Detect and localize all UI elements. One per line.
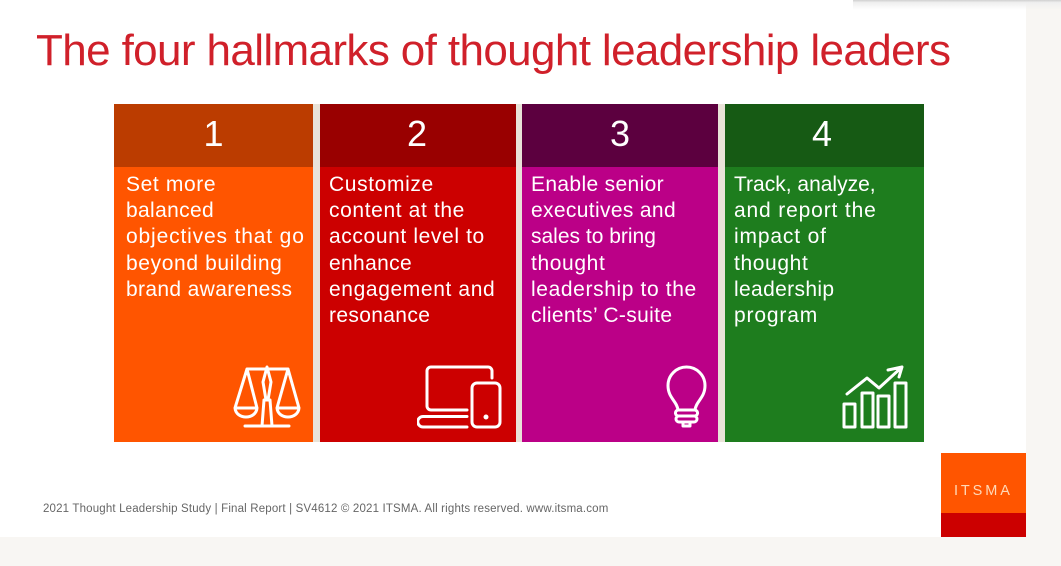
panel: hallmark 2 xyxy=(320,104,516,442)
text 3 xyxy=(531,173,697,327)
text 4: impact of xyxy=(734,225,827,248)
text 1 xyxy=(126,173,305,301)
text 2 xyxy=(329,173,495,327)
logo text: ITSMA xyxy=(954,483,1013,499)
text 3: clients’ C-suite xyxy=(531,304,672,327)
text 3: leadership to the xyxy=(531,278,697,301)
text 3: executives and xyxy=(531,199,676,222)
panel: hallmark 1 xyxy=(114,104,313,442)
icon: light bulb xyxy=(666,366,706,428)
text 2: enhance xyxy=(329,252,412,275)
text 3: Enable senior xyxy=(531,173,664,196)
text 2: content at the xyxy=(329,199,465,222)
text 3: thought xyxy=(531,252,605,275)
text 4 xyxy=(734,173,877,327)
number 2: 2 xyxy=(407,113,427,154)
logo: ITSMA xyxy=(941,453,1026,537)
text 2: account level to xyxy=(329,225,485,248)
text 1: Set more xyxy=(126,173,216,196)
number 1: 1 xyxy=(203,113,224,154)
text 4: leadership xyxy=(734,278,834,301)
number 3 xyxy=(522,104,718,167)
number 4 xyxy=(725,104,924,167)
icon: scales xyxy=(234,366,300,428)
text 2: Customize xyxy=(329,173,434,196)
text 1: brand awareness xyxy=(126,278,292,301)
text 1: balanced xyxy=(126,199,214,222)
number 2 xyxy=(320,104,516,167)
top shadow xyxy=(853,0,1061,10)
icon: laptop and tablet xyxy=(417,366,502,428)
icon: growth chart xyxy=(842,365,908,428)
number 3: 3 xyxy=(610,113,630,154)
panel: hallmark 3 xyxy=(522,104,718,442)
panel: hallmark 4 xyxy=(725,104,924,442)
text 3: sales to bring xyxy=(531,225,656,248)
text 4: Track, analyze, xyxy=(734,173,876,196)
cream divider strip xyxy=(313,104,725,442)
number 1 xyxy=(114,104,313,167)
text 2: engagement and xyxy=(329,278,495,301)
text 4: program xyxy=(734,304,818,327)
number 4: 4 xyxy=(812,113,832,154)
logo red band xyxy=(941,513,1026,537)
text 1: beyond building xyxy=(126,252,282,275)
text 4: and report the xyxy=(734,199,877,222)
text 1: objectives that go xyxy=(126,225,305,248)
text 2: resonance xyxy=(329,304,430,327)
text 4: thought xyxy=(734,252,808,275)
title: The four hallmarks of thought leadership leaders xyxy=(36,26,950,75)
footer text: 2021 Thought Leadership Study | Final Report | SV4612 © 2021 ITSMA. All rights reserved. www.itsma.com xyxy=(43,503,608,515)
